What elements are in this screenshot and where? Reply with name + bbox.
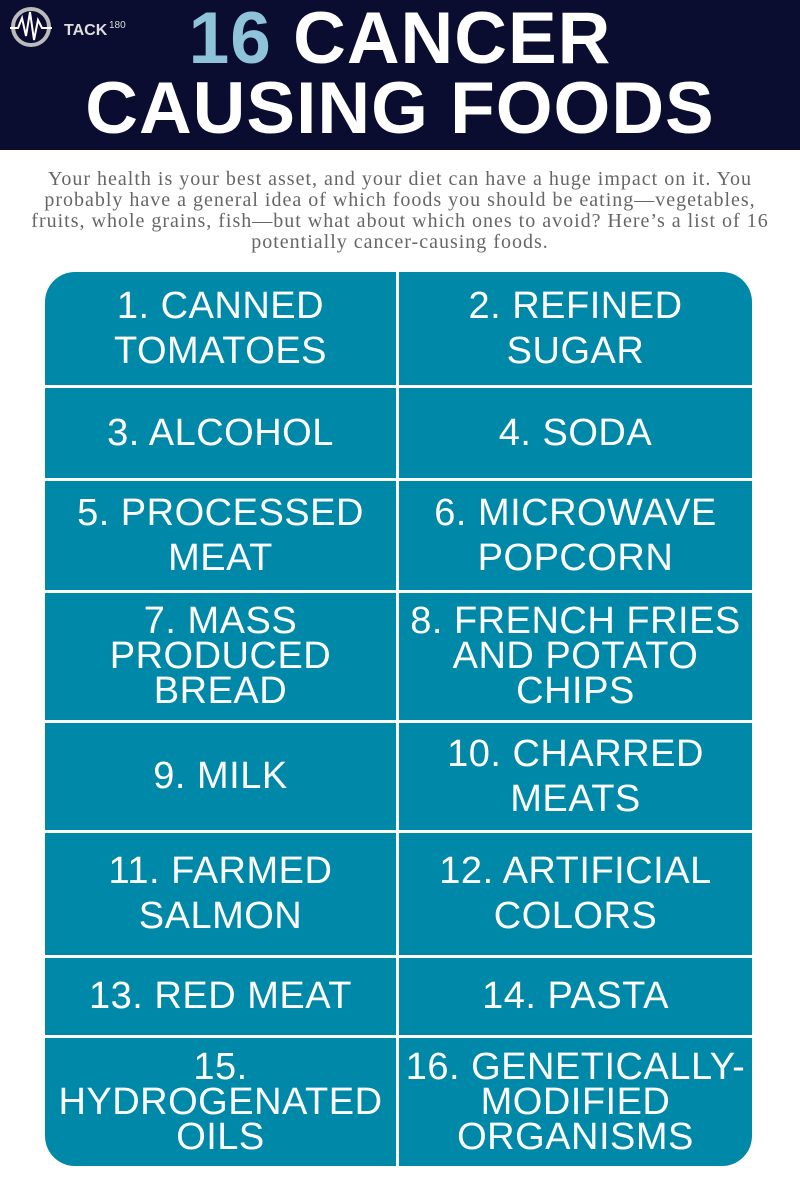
logo: 180 — [109, 20, 126, 31]
food grid: OILS — [176, 1116, 265, 1158]
title: 16 CANCER — [189, 0, 611, 79]
food grid: COLORS — [494, 895, 657, 937]
intro text: potentially cancer-causing foods. — [251, 231, 549, 253]
food grid: 3. ALCOHOL — [107, 412, 334, 454]
intro text: probably have a general idea of which foods you should be eating—vegetables, — [44, 189, 756, 211]
food grid: 13. RED MEAT — [89, 975, 352, 1017]
food grid: 9. MILK — [153, 755, 288, 797]
food grid: 1. CANNED — [117, 284, 324, 326]
food grid: MEAT — [168, 536, 273, 578]
food grid: SALMON — [139, 895, 302, 937]
food grid: 2. REFINED — [468, 284, 683, 326]
food grid: 10. CHARRED — [447, 732, 704, 774]
intro text: fruits, whole grains, fish—but what about which ones to avoid? Here’s a list of 16 — [31, 210, 769, 232]
food grid: BREAD — [154, 670, 287, 712]
food grid: POPCORN — [478, 536, 673, 578]
title: CAUSING FOODS — [85, 68, 715, 149]
food grid: 6. MICROWAVE — [434, 492, 717, 534]
logo — [10, 7, 126, 47]
food grid: AND POTATO — [453, 635, 698, 677]
food grid: 8. FRENCH FRIES — [410, 600, 741, 642]
food grid: MODIFIED — [481, 1080, 670, 1122]
food grid: 16. GENETICALLY- — [406, 1046, 745, 1088]
food grid: TOMATOES — [114, 330, 327, 372]
food grid: HYDROGENATED — [58, 1080, 383, 1122]
food grid: 14. PASTA — [482, 975, 669, 1017]
food grid — [45, 272, 752, 1166]
food grid: 15. — [193, 1046, 248, 1088]
food grid: 5. PROCESSED — [77, 492, 364, 534]
logo: TACK — [64, 22, 108, 39]
food grid: SUGAR — [507, 330, 644, 372]
food grid: 4. SODA — [499, 412, 652, 454]
title — [85, 0, 715, 149]
intro text — [31, 168, 769, 253]
food grid: PRODUCED — [110, 635, 331, 677]
food grid: 12. ARTIFICIAL — [439, 850, 712, 892]
food grid: 11. FARMED — [109, 850, 332, 892]
header band — [0, 0, 800, 150]
food grid: 7. MASS — [144, 600, 297, 642]
food grid: MEATS — [510, 778, 641, 820]
intro text: Your health is your best asset, and your diet can have a huge impact on it. You — [48, 168, 752, 190]
food grid: CHIPS — [516, 670, 635, 712]
food grid: ORGANISMS — [457, 1116, 694, 1158]
